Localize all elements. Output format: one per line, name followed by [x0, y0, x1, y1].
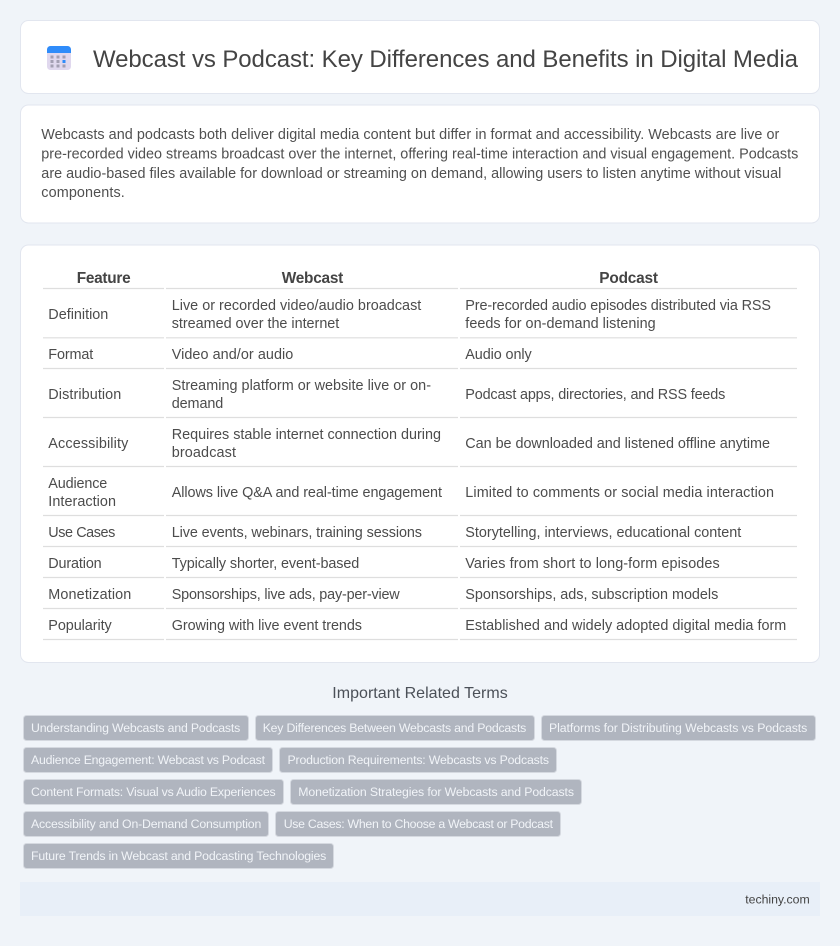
- row: duration: Typically shorter, event-based: [172, 556, 359, 572]
- row: audience interaction: Limited to comments or social media interaction: [465, 485, 774, 501]
- tag: content formats: Content Formats: Visual vs Audio Experiences: [31, 785, 276, 799]
- tag: understanding: [24, 716, 248, 740]
- row: popularity: [48, 618, 786, 634]
- tag: audience engagement: Audience Engagement: Webcast vs Podcast: [31, 753, 266, 767]
- footer source text: techiny.com: [745, 892, 810, 906]
- title: Webcast vs Podcast: Key Differences and Benefits in Digital Media: [93, 46, 799, 73]
- panel: comparison table: [20, 245, 820, 662]
- row: monetization: Sponsorships, live ads, pay-per-view: [172, 587, 400, 603]
- row: duration: Varies from short to long-form episodes: [465, 556, 720, 572]
- row: distribution: [48, 378, 725, 412]
- tag: understanding: Understanding Webcasts and Podcasts: [31, 721, 240, 735]
- row: accessibility: Can be downloaded and listened offline anytime: [465, 436, 770, 452]
- footer: [20, 882, 820, 916]
- row: use cases: [48, 525, 741, 541]
- row: use cases: Storytelling, interviews, educational content: [465, 525, 741, 541]
- panel: page header: [20, 20, 820, 94]
- table header row: Webcast: [282, 270, 343, 287]
- text block: introduction paragraph: Webcasts and podcasts both deliver digital media content but differ in format and accessibility. Webcasts are live or: [41, 127, 780, 143]
- text block: introduction paragraph: pre-recorded video streams broadcast over the internet, offering real-time interaction and visual engagement. Podcasts: [41, 146, 798, 162]
- row: accessibility: Requires stable internet connection during: [172, 427, 441, 443]
- row: accessibility: Accessibility: [48, 436, 129, 452]
- row: definition: Pre-recorded audio episodes distributed via RSS: [465, 298, 771, 314]
- row: accessibility: broadcast: [172, 445, 236, 461]
- row: duration: [48, 556, 720, 572]
- tag: platforms: [542, 716, 816, 740]
- row: audience interaction: Interaction: [48, 494, 116, 510]
- row: definition: streamed over the internet: [172, 316, 339, 332]
- row: use cases: Live events, webinars, training sessions: [172, 525, 422, 541]
- row: format: Audio only: [465, 347, 532, 363]
- tag: monetization strategies: Monetization Strategies for Webcasts and Podcasts: [298, 785, 574, 799]
- tag: monetization strategies: [290, 780, 582, 804]
- row: duration: Duration: [48, 556, 102, 572]
- row: popularity: Established and widely adopted digital media form: [465, 618, 786, 634]
- table header row: [77, 270, 658, 287]
- row: definition: feeds for on-demand listening: [465, 316, 656, 332]
- tag: accessibility: Accessibility and On-Demand Consumption: [31, 817, 261, 831]
- table header row: Feature: [77, 270, 131, 287]
- row: monetization: Monetization: [48, 587, 131, 603]
- table header row: Podcast: [599, 270, 658, 287]
- row: audience interaction: Allows live Q&A and real-time engagement: [172, 485, 442, 501]
- row: audience interaction: Audience: [48, 476, 107, 492]
- tag: use cases: Use Cases: When to Choose a Webcast or Podcast: [284, 817, 554, 831]
- tag: audience engagement: [24, 748, 272, 772]
- tag: future trends: Future Trends in Webcast and Podcasting Technologies: [31, 849, 326, 863]
- row: definition: Definition: [48, 307, 108, 323]
- text block: introduction paragraph: are audio-based files available for download or streaming on demand, allowing users to listen anytime without visual: [41, 166, 781, 182]
- row: format: Video and/or audio: [172, 347, 293, 363]
- tag: production requirements: [280, 748, 556, 772]
- row: definition: [48, 298, 771, 332]
- row: use cases: Use Cases: [48, 525, 115, 541]
- tag: accessibility: [24, 812, 268, 836]
- row: distribution: demand: [172, 396, 223, 412]
- row: format: [48, 347, 532, 363]
- tag: content formats: [24, 780, 284, 804]
- row: audience interaction: [48, 476, 774, 510]
- panel: related term tags: [24, 716, 816, 868]
- tag: future trends: [24, 844, 334, 868]
- row: format: Format: [48, 347, 93, 363]
- tag: key differences: [256, 716, 534, 740]
- row: distribution: Streaming platform or website live or on-: [172, 378, 431, 394]
- row: monetization: [48, 587, 718, 603]
- text block: introduction paragraph: components.: [41, 185, 125, 201]
- tag: production requirements: Production Requirements: Webcasts vs Podcasts: [288, 753, 549, 767]
- row: definition: Live or recorded video/audio broadcast: [172, 298, 421, 314]
- icon: calendar: [47, 46, 71, 70]
- row: accessibility: [48, 427, 770, 461]
- tag: use cases: [276, 812, 560, 836]
- row: popularity: Popularity: [48, 618, 112, 634]
- heading: important related terms: Important Related Terms: [332, 685, 508, 702]
- row: distribution: Podcast apps, directories, and RSS feeds: [465, 387, 725, 403]
- tag: platforms: Platforms for Distributing Webcasts vs Podcasts: [549, 721, 807, 735]
- panel: introduction: [20, 105, 820, 223]
- tag: key differences: Key Differences Between Webcasts and Podcasts: [263, 721, 526, 735]
- row: distribution: Distribution: [48, 387, 121, 403]
- row: popularity: Growing with live event trends: [172, 618, 362, 634]
- text block: introduction paragraph: [41, 127, 798, 201]
- row: monetization: Sponsorships, ads, subscription models: [465, 587, 718, 603]
